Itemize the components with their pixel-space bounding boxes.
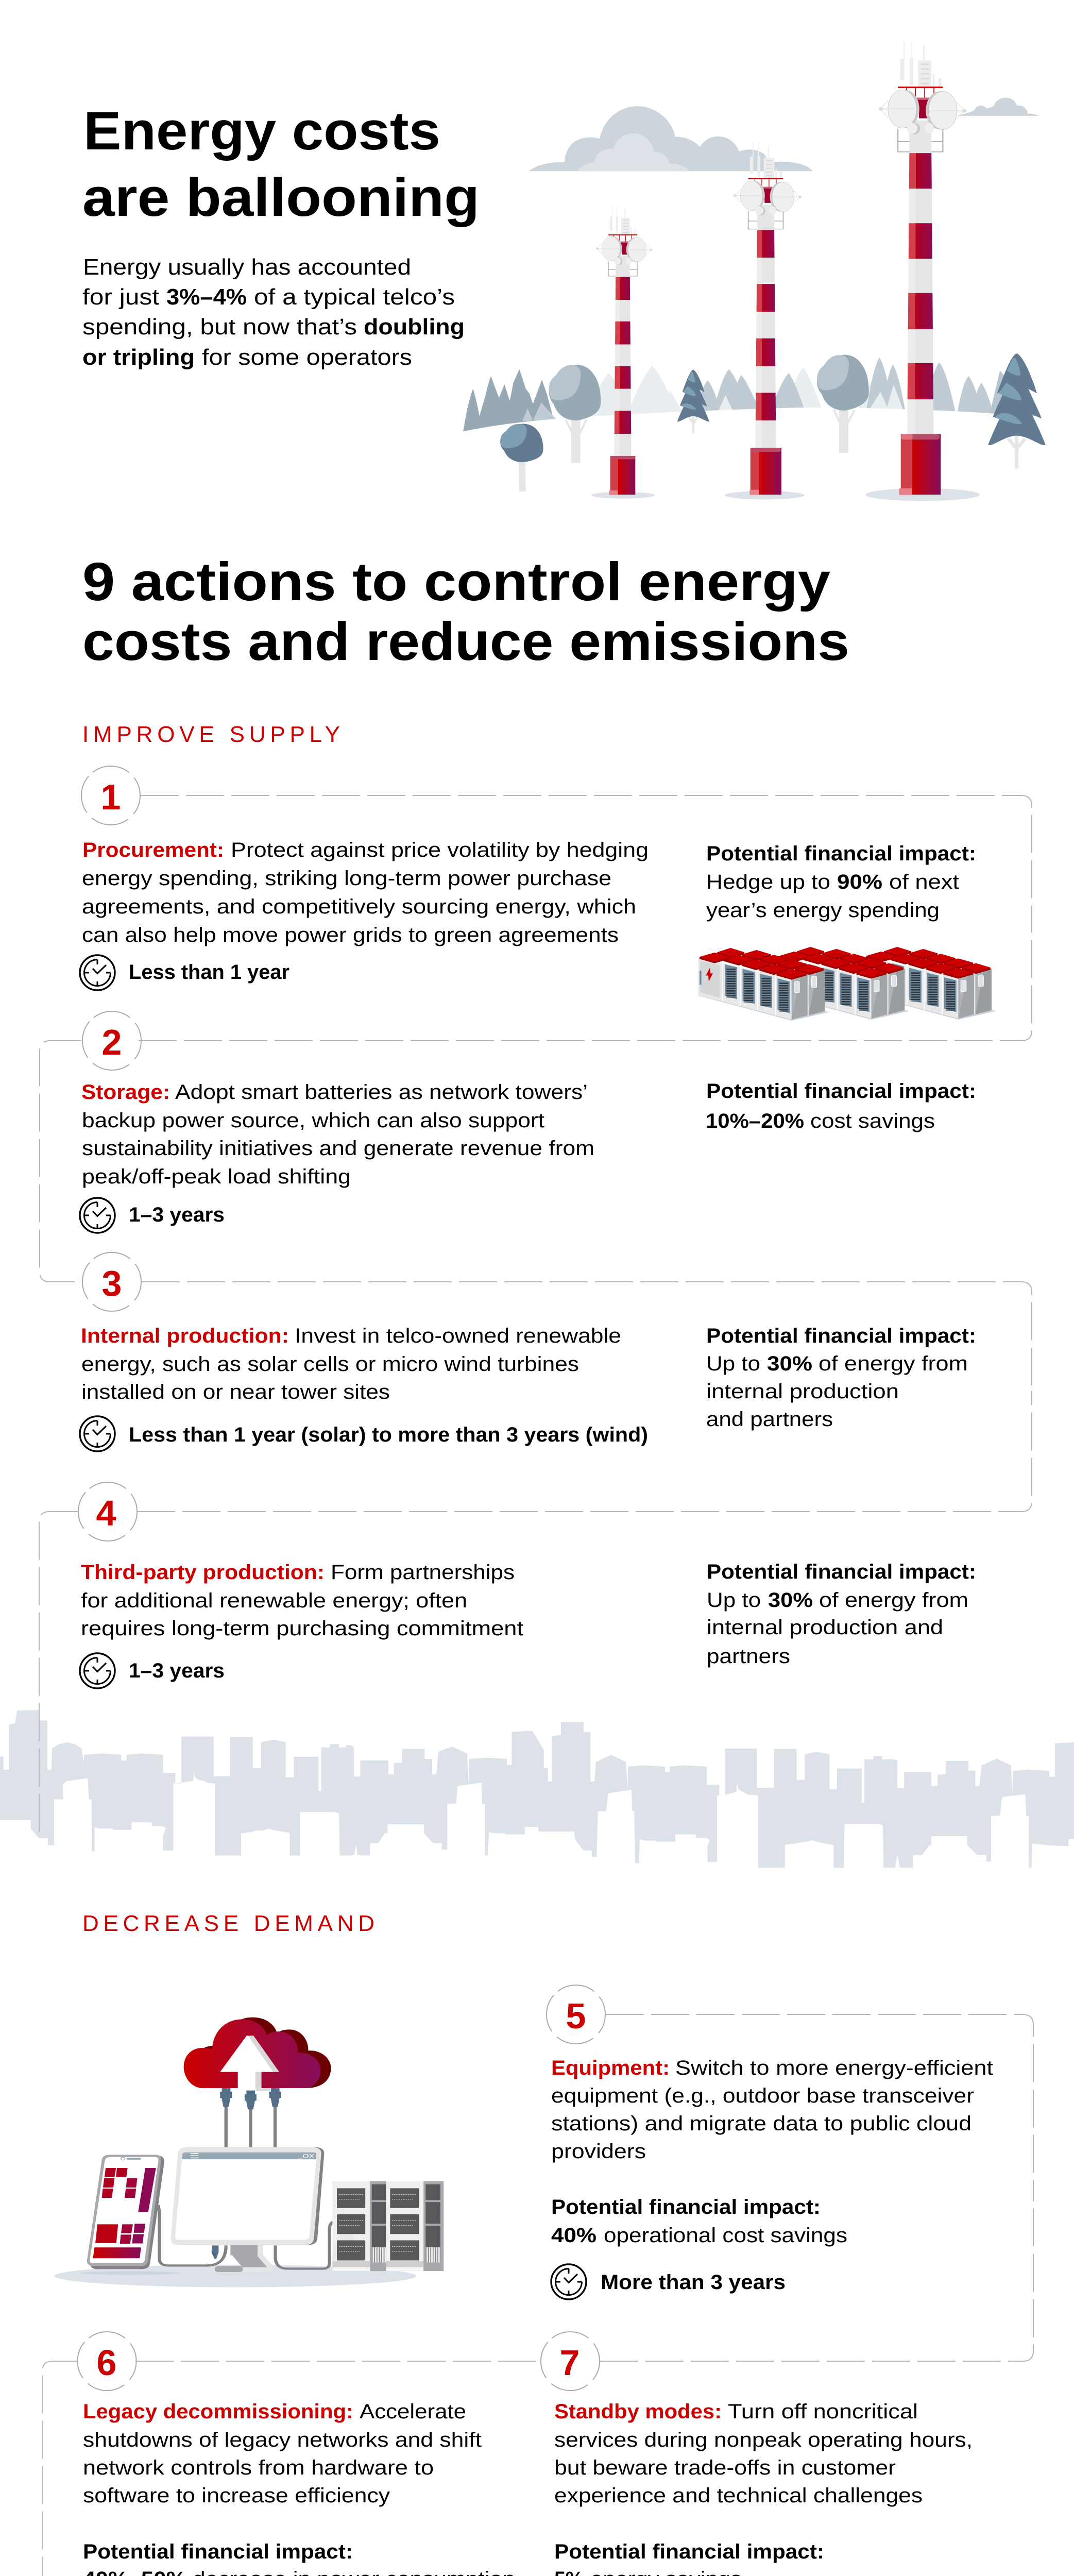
- icon: monitor: [171, 2147, 324, 2272]
- financial impact: and partners: [706, 1408, 833, 1431]
- number badge 2: [71, 999, 153, 1082]
- description: agreements, and competitively sourcing energy, which: [82, 895, 636, 918]
- illustration: devices connected to cloud: [55, 2018, 444, 2287]
- main heading: costs and reduce emissions: [82, 612, 849, 672]
- description: installed on or near tower sites: [81, 1381, 390, 1403]
- action 5: equipment: [535, 1973, 993, 2299]
- number badge 3: 3: [102, 1263, 122, 1303]
- icon: small pine: [677, 370, 709, 434]
- description: Adopt smart batteries as network towers’: [175, 1081, 588, 1104]
- financial impact: Potential financial impact:: [706, 1325, 976, 1347]
- financial impact: [83, 2540, 515, 2576]
- financial impact: 90%: [837, 871, 882, 893]
- timeline: More than 3 years: [601, 2271, 786, 2294]
- tower: medium: [725, 143, 805, 499]
- timeline: [551, 2264, 786, 2299]
- intro text block: or tripling: [82, 345, 195, 370]
- description: for additional renewable energy; often: [81, 1589, 467, 1612]
- intro text block: 3%–4%: [166, 284, 247, 310]
- description: Accelerate: [360, 2400, 466, 2423]
- number badge 2: 2: [102, 1022, 122, 1062]
- timeline: [80, 1653, 225, 1688]
- description: [551, 2057, 993, 2163]
- number badge 4: 4: [96, 1493, 116, 1533]
- description: providers: [551, 2140, 646, 2163]
- action 2: storage: [71, 999, 976, 1233]
- section label: decrease demand: DECREASE DEMAND: [82, 1911, 374, 1936]
- financial impact: Potential financial impact:: [706, 842, 976, 865]
- intro text block: Energy usually has accounted: [83, 255, 411, 280]
- ground: [458, 408, 1050, 504]
- description: equipment (e.g., outdoor base transceiver: [551, 2084, 974, 2107]
- financial impact: Potential financial impact:: [83, 2540, 353, 2563]
- financial impact: internal production: [706, 1380, 899, 1403]
- floor shadow: [55, 2265, 416, 2287]
- financial impact: operational cost savings: [604, 2224, 847, 2247]
- description: software to increase efficiency: [83, 2484, 390, 2507]
- intro text block: spending, but now that’s: [82, 314, 357, 340]
- icon: large cloud: [529, 106, 813, 171]
- description: shutdowns of legacy networks and shift: [83, 2429, 482, 2451]
- description: Invest in telco-owned renewable: [295, 1325, 621, 1347]
- financial impact: [554, 2540, 824, 2576]
- icon: small cloud: [957, 98, 1039, 116]
- description: but beware trade-offs in customer: [554, 2456, 896, 2479]
- section label: improve supply: IMPROVE SUPPLY: [82, 722, 340, 747]
- skyline: [0, 1710, 1074, 1868]
- description: peak/off-peak load shifting: [82, 1165, 351, 1188]
- illustration: telecom towers in landscape: [458, 41, 1050, 504]
- title: Energy costs: [83, 101, 440, 161]
- number badge 5: [535, 1973, 617, 2056]
- tower: small: [591, 206, 655, 499]
- timeline: Less than 1 year: [129, 961, 289, 984]
- dashed connector path: supply: [39, 795, 1032, 1838]
- financial impact: Potential financial impact:: [707, 1561, 976, 1583]
- financial impact: of energy from: [819, 1589, 968, 1612]
- icon: servers: [332, 2181, 444, 2271]
- description: [83, 2400, 482, 2507]
- action 4: third-party production: [66, 1470, 976, 1688]
- timeline: [80, 955, 289, 990]
- financial impact: 30%: [768, 1589, 813, 1612]
- financial impact: of energy from: [819, 1352, 968, 1375]
- intro text block: for just: [82, 284, 159, 310]
- number badge 7: 7: [560, 2343, 579, 2383]
- financial impact: 10%–20%: [706, 1110, 804, 1132]
- main heading: 9 actions to control energy: [82, 552, 830, 612]
- description: backup power source, which can also support: [82, 1109, 544, 1132]
- timeline: 1–3 years: [129, 1204, 225, 1226]
- action 3: internal production: [71, 1241, 976, 1451]
- main heading: [82, 552, 849, 672]
- description: requires long-term purchasing commitment: [81, 1617, 523, 1640]
- financial impact: Up to: [706, 1352, 760, 1375]
- intro text block: [82, 255, 465, 370]
- icon: small dark round tree: [500, 423, 543, 492]
- description: [81, 1325, 621, 1403]
- description: Switch to more energy-efficient: [675, 2057, 993, 2079]
- icon: round tree left: [549, 365, 601, 463]
- financial impact: cost savings: [810, 1110, 935, 1132]
- number badge 1: [70, 754, 152, 837]
- icon: smartphone: [87, 2155, 164, 2269]
- financial impact: [706, 1325, 976, 1431]
- number badge 3: [71, 1241, 153, 1323]
- financial impact: of next: [889, 871, 959, 893]
- description: Standby modes:: [554, 2400, 722, 2423]
- number badge 5: 5: [566, 1996, 586, 2036]
- description: Equipment:: [551, 2057, 670, 2079]
- description: stations) and migrate data to public cloud: [551, 2112, 971, 2135]
- description: [81, 1561, 523, 1640]
- financial impact: Potential financial impact:: [706, 1080, 976, 1103]
- description: can also help move power grids to green agreements: [82, 924, 619, 946]
- financial impact: partners: [707, 1645, 790, 1668]
- financial impact: internal production and: [707, 1616, 943, 1639]
- number badge 1: 1: [101, 777, 121, 817]
- dashed connector path: demand: [42, 2014, 1033, 2576]
- financial impact: [706, 842, 976, 922]
- financial impact: Potential financial impact:: [554, 2540, 824, 2563]
- description: energy, such as solar cells or micro wind turbines: [81, 1353, 579, 1376]
- cables and connectors: [158, 2088, 333, 2269]
- timeline: Less than 1 year (solar) to more than 3 years (wind): [129, 1423, 648, 1446]
- title: are ballooning: [82, 167, 480, 228]
- action 1: procurement: [70, 754, 996, 1021]
- intro text block: for some operators: [202, 345, 412, 370]
- financial impact: [707, 1561, 976, 1668]
- background forest: [463, 358, 1039, 432]
- timeline: 1–3 years: [129, 1659, 225, 1682]
- description: Internal production:: [81, 1325, 289, 1347]
- tower: tall: [865, 41, 980, 501]
- number badge 4: [66, 1470, 149, 1553]
- icon: cloud with upload arrow: [184, 2018, 331, 2091]
- number badge 6: 6: [97, 2343, 116, 2383]
- description: [82, 839, 649, 946]
- financial impact: [706, 1080, 976, 1132]
- description: [81, 1081, 594, 1188]
- intro text block: of a typical telco’s: [254, 284, 455, 310]
- icon: large pine: [988, 353, 1046, 469]
- financial impact: Up to: [707, 1589, 761, 1612]
- title: [82, 101, 480, 228]
- description: network controls from hardware to: [83, 2456, 434, 2479]
- number badge 7: [529, 2320, 611, 2402]
- description: Procurement:: [82, 839, 224, 861]
- description: Legacy decommissioning:: [83, 2400, 353, 2423]
- financial impact: Hedge up to: [706, 871, 830, 893]
- hero section: [82, 41, 1050, 504]
- description: Form partnerships: [331, 1561, 515, 1584]
- description: Protect against price volatility by hedging: [231, 839, 649, 861]
- description: services during nonpeak operating hours,: [554, 2429, 973, 2451]
- financial impact: 40%: [551, 2224, 596, 2247]
- financial impact: year’s energy spending: [706, 899, 940, 922]
- icon: round tree right: [817, 355, 869, 453]
- action 6: legacy decommissioning: [65, 2320, 515, 2576]
- description: Third-party production:: [81, 1561, 325, 1584]
- intro text block: doubling: [364, 314, 465, 340]
- description: [554, 2400, 973, 2507]
- description: experience and technical challenges: [554, 2484, 923, 2507]
- illustration: battery cabinets: [698, 947, 996, 1021]
- description: Storage:: [81, 1081, 170, 1104]
- description: energy spending, striking long-term power purchase: [82, 867, 611, 890]
- timeline: [80, 1198, 225, 1233]
- description: Turn off noncritical: [728, 2400, 918, 2423]
- action 7: standby modes: [529, 2320, 973, 2576]
- icon: monitor: _OX: [297, 2153, 315, 2160]
- financial impact: [551, 2196, 847, 2247]
- financial impact: Potential financial impact:: [551, 2196, 821, 2218]
- financial impact: 30%: [767, 1352, 812, 1375]
- timeline: [80, 1416, 648, 1451]
- number badge 6: [65, 2320, 148, 2402]
- description: sustainability initiatives and generate revenue from: [82, 1137, 594, 1160]
